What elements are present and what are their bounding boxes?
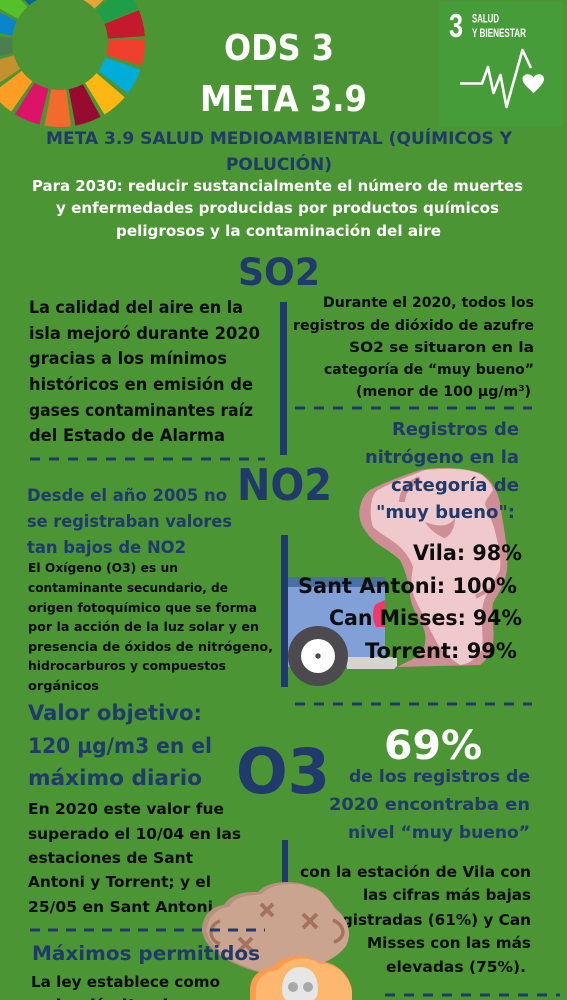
text block: station percentages: Vila: 98% bbox=[413, 541, 522, 565]
text block: SO2 records: SO2 se situaron en la bbox=[349, 340, 534, 356]
text block: exceedances in 2020: superado el 10/04 en las bbox=[28, 825, 241, 843]
text block: legal limit: La ley establece como bbox=[31, 973, 220, 991]
text block: nitrogen heading: "muy bueno": bbox=[376, 502, 515, 523]
text block: exceedances in 2020 bbox=[28, 800, 241, 916]
text block: ozone description: El Oxígeno (O3) es un bbox=[28, 560, 178, 575]
icon: truck illustration bbox=[288, 577, 397, 686]
text block: objective 2030: y enfermedades producidas por productos químicos bbox=[56, 199, 499, 217]
text block: ozone description: origen fotoquímico que se forma bbox=[28, 600, 257, 615]
text block: objective 2030: Para 2030: reducir sustancialmente el número de muertes bbox=[32, 177, 523, 195]
text block: nitrogen heading: categoría de bbox=[391, 475, 519, 496]
text block: SO2 records: categoría de “muy bueno” bbox=[324, 362, 534, 378]
text block: air quality: del Estado de Alarma bbox=[29, 426, 225, 446]
title bbox=[200, 28, 367, 120]
text block: nitrogen heading: nitrógeno en la bbox=[365, 447, 519, 468]
text block: 69% caption: nivel “muy bueno” bbox=[348, 823, 530, 843]
heading: O3: O3 bbox=[236, 735, 330, 808]
text block: air quality: gracias a los mínimos bbox=[29, 349, 227, 369]
heading: meta 3.9 bbox=[46, 129, 513, 174]
heading: maximum allowed: Máximos permitidos bbox=[32, 942, 260, 965]
text block: station percentages bbox=[298, 541, 522, 663]
text block: exceedances in 2020: En 2020 este valor fue bbox=[28, 800, 224, 818]
text block: exceedances in 2020: estaciones de Sant bbox=[28, 849, 194, 867]
icon: skull cloud bbox=[250, 956, 352, 1000]
text block: air quality: isla mejoró durante 2020 bbox=[29, 324, 260, 344]
icon: SDG 3 health and well-being badge: Y BIENESTAR bbox=[472, 26, 526, 40]
text block: station percentages: Torrent: 99% bbox=[365, 639, 517, 663]
text block: station percentages: Sant Antoni: 100% bbox=[298, 574, 517, 598]
text block: Vila and Can Misses figures bbox=[300, 863, 531, 976]
text block: air quality bbox=[29, 298, 260, 446]
text block: objective 2030 bbox=[32, 177, 523, 240]
text block: Vila and Can Misses figures: elevadas (75%). bbox=[386, 958, 526, 976]
text block: SO2 records: registros de dióxido de azufre bbox=[293, 318, 534, 334]
text block: SO2 records bbox=[293, 295, 534, 400]
icon: lungs illustration bbox=[359, 468, 507, 667]
text block: Vila and Can Misses figures: registradas (61%) y Can bbox=[324, 911, 531, 929]
icon: SDG colour wheel bbox=[0, 0, 146, 127]
text block: ozone description: orgánicos bbox=[28, 678, 99, 693]
text block: station percentages: Can Misses: 94% bbox=[329, 606, 522, 630]
heading: SO2: SO2 bbox=[238, 251, 320, 294]
text block: NO2 low values: tan bajos de NO2 bbox=[27, 538, 186, 557]
text block: ozone description bbox=[28, 560, 273, 693]
text block: Vila and Can Misses figures: las cifras más bajas bbox=[363, 886, 531, 904]
text block: ozone description: presencia de óxidos de nitrógeno, bbox=[28, 639, 273, 654]
text block: target value: 120 µg/m3 en el bbox=[28, 734, 212, 758]
text block: exceedances in 2020: 25/05 en Sant Antoni bbox=[28, 898, 213, 916]
text block: SO2 records: Durante el 2020, todos los bbox=[323, 295, 534, 311]
text block: objective 2030: peligrosos y la contaminación del aire bbox=[116, 222, 441, 240]
text block: nitrogen heading bbox=[365, 419, 519, 523]
text block: NO2 low values: Desde el año 2005 no bbox=[27, 486, 227, 505]
text block: target value: máximo diario bbox=[28, 766, 202, 790]
text block: nitrogen heading: Registros de bbox=[392, 419, 519, 440]
text block: air quality: gases contaminantes raíz bbox=[29, 401, 253, 421]
text block: 69% caption bbox=[329, 767, 530, 843]
text block: ozone description: por la acción de la luz solar y en bbox=[28, 619, 259, 634]
text block: 69% caption: 2020 encontraba en bbox=[329, 795, 530, 815]
icon: polluted brain cloud bbox=[202, 882, 349, 973]
icon: SDG 3 health and well-being badge: 3 bbox=[449, 7, 463, 44]
text block: 69% caption: de los registros de bbox=[349, 767, 530, 787]
heading: meta 3.9: POLUCIÓN) bbox=[226, 155, 332, 174]
text block: air quality: históricos en emisión de bbox=[29, 375, 253, 395]
text block: ozone description: contaminante secundario, de bbox=[28, 580, 228, 595]
title: META 3.9 bbox=[200, 79, 367, 120]
stat: 69%: 69% bbox=[384, 723, 482, 769]
title: ODS 3 bbox=[224, 28, 334, 69]
text block: Vila and Can Misses figures: con la estación de Vila con bbox=[300, 863, 531, 881]
text block: target value: Valor objetivo: bbox=[28, 701, 202, 725]
heading: NO2: NO2 bbox=[237, 460, 332, 511]
text block: exceedances in 2020: Antoni y Torrent; y el bbox=[28, 873, 211, 891]
text block: Vila and Can Misses figures: Misses con las más bbox=[367, 934, 531, 952]
icon: SDG 3 health and well-being badge bbox=[439, 2, 563, 126]
text block: NO2 low values: se registraban valores bbox=[27, 512, 232, 531]
heading: meta 3.9: META 3.9 SALUD MEDIOAMBIENTAL (QUÍMICOS Y bbox=[46, 129, 513, 148]
text block: ozone description: hidrocarburos y compuestos bbox=[28, 658, 226, 673]
text block: legal limit bbox=[31, 973, 220, 1000]
icon: SDG 3 health and well-being badge: SALUD bbox=[472, 12, 499, 26]
text block: SO2 records: (menor de 100 µg/m³) bbox=[356, 384, 531, 400]
text block: air quality: La calidad del aire en la bbox=[29, 298, 243, 318]
text block: NO2 low values bbox=[27, 486, 232, 557]
text block: target value bbox=[28, 701, 212, 790]
